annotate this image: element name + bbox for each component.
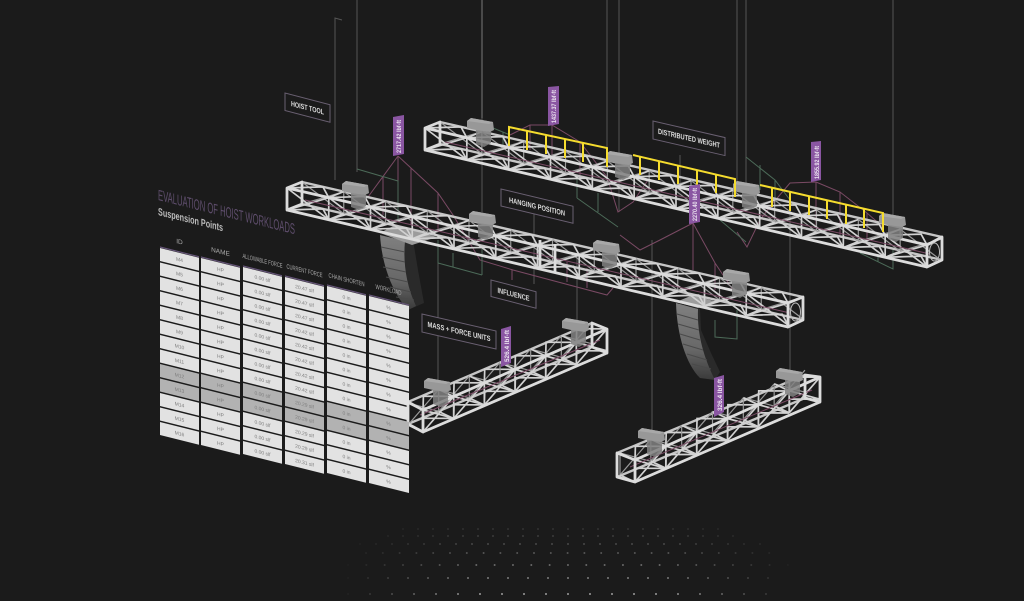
- label: hanging position: [501, 189, 573, 223]
- column: ID: M12: [175, 372, 185, 381]
- column: workload: %: [386, 348, 391, 356]
- column: chain shorten: 0 in: [342, 381, 351, 389]
- column: workload: %: [386, 479, 391, 486]
- column: chain shorten: 0 in: [342, 323, 351, 331]
- column: current force: 20.42 slf: [295, 328, 315, 338]
- column: chain shorten: 0 in: [342, 454, 351, 462]
- column: workload: %: [386, 363, 391, 370]
- column: workload: %: [386, 305, 391, 312]
- column: chain shorten: 0 in: [342, 352, 351, 360]
- truss B: middle: [287, 182, 803, 327]
- column: current force: 20.29 slf: [295, 444, 315, 454]
- column: current force: 20.47 slf: [295, 299, 315, 309]
- tag: 1437.37 lbf-ft: 1437.37 lbf-ft: [551, 89, 558, 123]
- column: workload: %: [386, 464, 391, 472]
- column: allowable force: [242, 253, 283, 464]
- truss A: upper rear: [425, 122, 942, 267]
- column: name: HP: [217, 368, 225, 376]
- influence diagrams (green): [357, 128, 893, 339]
- column: name: HP: [217, 339, 225, 347]
- column: allowable force: 0.00 slf: [254, 390, 271, 400]
- column: current force: 20.42 slf: [295, 371, 315, 382]
- column: allowable force: 0.00 slf: [254, 274, 271, 284]
- force diagrams (pink): [368, 125, 883, 295]
- label: distributed weight: DISTRIBUTED WEIGHT: [658, 127, 720, 150]
- column: name: HP: [217, 310, 225, 318]
- tag: 2270.40 lbf-ft: [689, 184, 700, 224]
- column: current force: 20.42 slf: [295, 342, 315, 353]
- column: ID: M15: [175, 416, 185, 424]
- speaker array: right: [676, 295, 720, 380]
- tag: 2717.42 lbf-ft: 2717.42 lbf-ft: [396, 119, 403, 153]
- label: distributed weight: [653, 121, 725, 156]
- column: ID: M16: [175, 430, 185, 439]
- column: name: HP: [217, 426, 225, 434]
- column: workload: %: [386, 377, 391, 385]
- hoist chain lines: [335, 0, 893, 430]
- column: workload: %: [386, 435, 391, 443]
- tag: 326.4 lbf-ft: [714, 375, 724, 417]
- column: current force: 20.29 slf: [295, 415, 315, 425]
- column: workload: %: [386, 450, 391, 457]
- column: ID: M7: [176, 300, 183, 308]
- column: chain shorten: [327, 272, 366, 483]
- column: name: NAME: [211, 247, 230, 258]
- column: workload: %: [386, 319, 391, 327]
- column: ID: ID: [176, 238, 183, 247]
- column: allowable force: 0.00 slf: [254, 405, 271, 415]
- column: workload: %: [386, 392, 391, 399]
- column: ID: M6: [176, 286, 183, 293]
- column: workload: %: [386, 406, 391, 414]
- label: mass + force units: [422, 314, 496, 349]
- column: chain shorten: CHAIN SHORTEN: [329, 272, 365, 288]
- column: ID: M8: [176, 315, 183, 322]
- yellow distributed load rails: [509, 127, 883, 232]
- tag: 1855.92 lbf-ft: [811, 141, 821, 182]
- column: allowable force: 0.00 slf: [254, 376, 271, 386]
- column: chain shorten: 0 in: [342, 396, 351, 404]
- column: name: HP: [217, 296, 225, 303]
- column: current force: 20.31 slf: [295, 458, 315, 469]
- table: suspension points: [160, 234, 409, 493]
- column: chain shorten: 0 in: [342, 439, 351, 447]
- column: workload: %: [386, 421, 391, 428]
- column: ID: M10: [175, 343, 185, 352]
- column: current force: 20.42 slf: [295, 357, 315, 367]
- column: current force: 20.47 slf: [295, 284, 315, 295]
- column: current force: 20.42 slf: [295, 386, 315, 396]
- column: allowable force: 0.00 slf: [254, 419, 271, 429]
- column: chain shorten: 0 in: [342, 338, 351, 346]
- column: allowable force: 0.00 slf: [254, 361, 271, 371]
- tag: 2717.42 lbf-ft: [393, 115, 404, 156]
- hoists on truss B: [342, 181, 750, 298]
- column: ID: M13: [175, 387, 185, 395]
- column: chain shorten: 0 in: [342, 309, 351, 317]
- column: allowable force: 0.00 slf: [254, 289, 271, 299]
- tag: 526.4 lbf-ft: [501, 326, 511, 367]
- column: ID: M11: [175, 358, 184, 366]
- column: chain shorten: 0 in: [342, 425, 351, 433]
- column: name: HP: [217, 325, 225, 332]
- column: ID: M4: [176, 257, 183, 264]
- column: allowable force: 0.00 slf: [254, 303, 271, 313]
- column: current force: CURRENT FORCE: [287, 263, 323, 279]
- column: allowable force: 0.00 slf: [254, 332, 271, 342]
- label: influence: [491, 280, 536, 308]
- column: current force: 20.29 slf: [295, 429, 315, 440]
- label: hoist tool: [285, 93, 330, 122]
- column: name: HP: [217, 281, 225, 289]
- column: allowable force: 0.00 slf: [254, 318, 271, 328]
- hoists on truss A: [467, 118, 906, 242]
- label: mass + force units: MASS + FORCE UNITS: [428, 320, 491, 343]
- column: current force: [285, 263, 324, 474]
- column: chain shorten: 0 in: [342, 367, 351, 375]
- floor dot grid: [348, 529, 788, 594]
- column: allowable force: ALLOWABLE FORCE: [243, 253, 283, 270]
- tag: 326.4 lbf-ft: 326.4 lbf-ft: [717, 378, 724, 411]
- column: workload: [369, 282, 409, 493]
- title: EVALUATION OF HOIST WORKLOADS: [158, 187, 295, 238]
- column: current force: 20.29 slf: [295, 400, 315, 411]
- column: name: HP: [217, 383, 225, 390]
- label: influence: INFLUENCE: [497, 286, 529, 303]
- truss D: lower right: [617, 370, 820, 482]
- column: name: HP: [217, 354, 225, 361]
- subtitle: Suspension Points: [158, 206, 223, 234]
- column: name: HP: [217, 441, 225, 448]
- tag: 2270.40 lbf-ft: 2270.40 lbf-ft: [692, 187, 699, 221]
- column: ID: M9: [176, 329, 183, 337]
- hoists on truss C: [424, 318, 589, 407]
- column: allowable force: 0.00 slf: [254, 434, 271, 444]
- column: chain shorten: 0 in: [342, 294, 351, 302]
- truss C: lower left: [408, 322, 607, 432]
- column: chain shorten: 0 in: [342, 468, 351, 476]
- column: name: HP: [217, 267, 225, 274]
- speaker array: left: [380, 225, 437, 310]
- column: allowable force: 0.00 slf: [254, 347, 271, 357]
- column: name: HP: [217, 397, 225, 405]
- column: ID: M5: [176, 271, 183, 279]
- column: ID: [160, 234, 199, 445]
- tag: 526.4 lbf-ft: 526.4 lbf-ft: [504, 329, 511, 362]
- column: workload: WORKLOAD: [376, 284, 402, 297]
- column: workload: %: [386, 334, 391, 341]
- column: allowable force: 0.00 slf: [254, 448, 271, 458]
- label: hoist tool: HOIST TOOL: [291, 99, 324, 117]
- column: chain shorten: 0 in: [342, 410, 351, 418]
- label: hanging position: HANGING POSITION: [509, 196, 565, 218]
- column: name: HP: [217, 412, 225, 419]
- column: name: [201, 244, 240, 455]
- tag: 1855.92 lbf-ft: 1855.92 lbf-ft: [814, 145, 821, 179]
- tag: 1437.37 lbf-ft: [548, 86, 559, 126]
- column: current force: 20.47 slf: [295, 313, 315, 324]
- hoists on truss D: [638, 368, 803, 457]
- column: ID: M14: [175, 401, 185, 410]
